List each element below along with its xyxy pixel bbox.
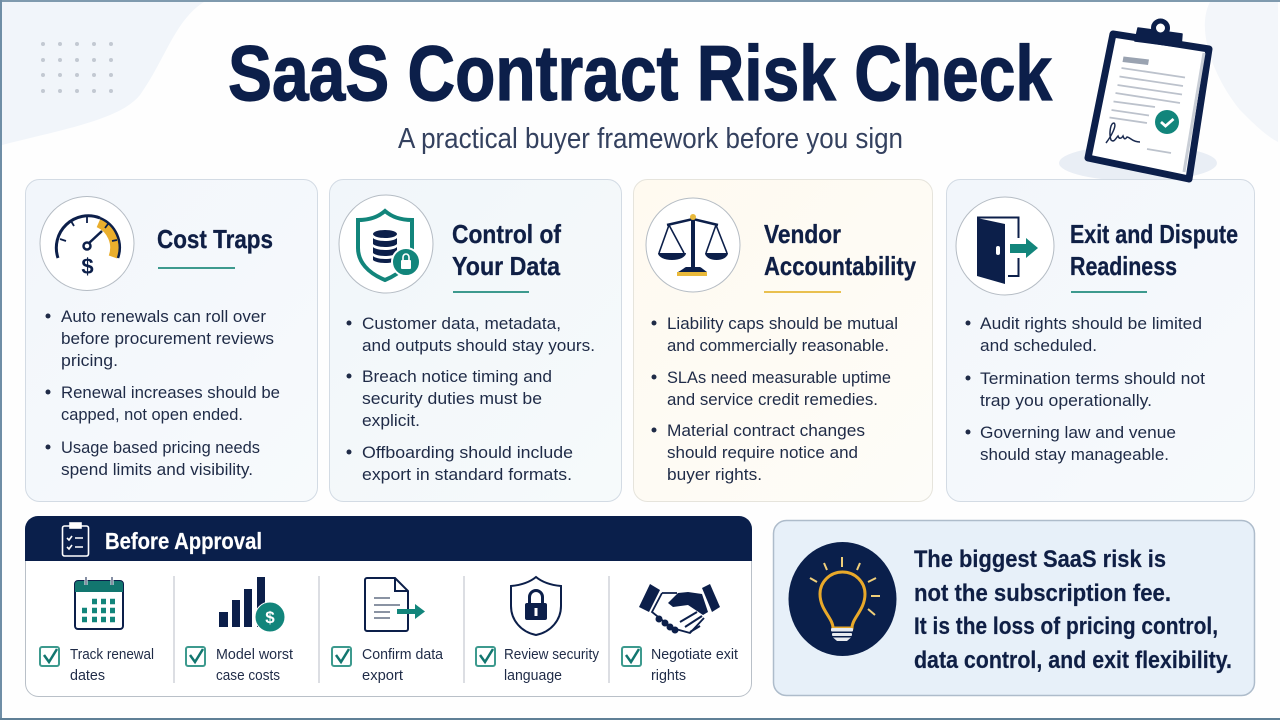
bullet list: explicit. bbox=[362, 412, 420, 430]
bullet list: Breach notice timing and bbox=[362, 368, 552, 386]
item: review security language: Review security bbox=[504, 647, 600, 663]
bullet list: spend limits and visibility. bbox=[61, 461, 253, 479]
heading: Accountability bbox=[764, 251, 916, 281]
callout text bbox=[914, 546, 1232, 674]
heading: Your Data bbox=[452, 251, 560, 281]
bullet list: pricing. bbox=[61, 352, 118, 370]
item: track renewal dates bbox=[40, 577, 154, 684]
heading: Control of bbox=[452, 219, 561, 249]
icon: balance scales bbox=[646, 198, 740, 292]
panel: cost traps bbox=[26, 180, 318, 502]
item: negotiate exit rights: rights bbox=[651, 668, 686, 684]
bullet list bbox=[652, 315, 898, 484]
item: model worst case costs bbox=[186, 577, 293, 684]
icon: shield with padlock bbox=[511, 577, 561, 635]
heading: Vendor bbox=[764, 219, 841, 249]
item: model worst case costs: Model worst bbox=[216, 647, 293, 663]
panel: control of your data bbox=[330, 180, 622, 502]
bullet list bbox=[966, 315, 1205, 464]
item: confirm data export: export bbox=[362, 668, 403, 684]
item: negotiate exit rights: Negotiate exit bbox=[651, 647, 738, 663]
icon: gauge with dollar sign: $ bbox=[81, 254, 94, 279]
heading: Readiness bbox=[1070, 251, 1177, 281]
icon: document with arrow bbox=[365, 578, 425, 631]
bullet list: Customer data, metadata, bbox=[362, 315, 561, 333]
panel: before approval checklist bbox=[25, 516, 752, 696]
bullet list: should stay manageable. bbox=[980, 446, 1169, 464]
bullet list: and outputs should stay yours. bbox=[362, 337, 595, 355]
bullet list bbox=[346, 315, 595, 484]
item: review security language bbox=[476, 577, 600, 684]
subtitle: A practical buyer framework before you sign bbox=[398, 123, 903, 155]
heading bbox=[764, 219, 916, 281]
panel: exit and dispute readiness bbox=[946, 180, 1254, 502]
bullet list: before procurement reviews bbox=[61, 330, 274, 348]
bullet list: should require notice and bbox=[667, 444, 858, 462]
callout text: The biggest SaaS risk is bbox=[914, 546, 1166, 573]
bullet list: Auto renewals can roll over bbox=[61, 308, 267, 326]
title: SaaS Contract Risk Check bbox=[228, 29, 1053, 117]
bullet list: and service credit remedies. bbox=[667, 391, 878, 409]
bullet list: Governing law and venue bbox=[980, 424, 1176, 442]
item: model worst case costs: case costs bbox=[216, 668, 280, 684]
dot pattern bbox=[41, 42, 113, 93]
bullet list: trap you operationally. bbox=[980, 392, 1152, 410]
callout text: It is the loss of pricing control, bbox=[914, 613, 1218, 640]
checkbox bbox=[186, 647, 205, 666]
icon: gauge with dollar sign bbox=[40, 196, 134, 290]
bullet list: buyer rights. bbox=[667, 466, 762, 484]
item: track renewal dates: dates bbox=[70, 668, 105, 684]
checkbox bbox=[40, 647, 59, 666]
icon: checklist clipboard bbox=[62, 523, 88, 556]
bullet list: and commercially reasonable. bbox=[667, 337, 889, 355]
icon: clipboard with signed document bbox=[1088, 21, 1209, 179]
header bar bbox=[25, 516, 752, 561]
item: track renewal dates: Track renewal bbox=[70, 647, 154, 663]
bullet list: and scheduled. bbox=[980, 337, 1097, 355]
item: negotiate exit rights bbox=[622, 584, 738, 684]
heading bbox=[452, 219, 561, 281]
heading: Cost Traps bbox=[157, 224, 273, 254]
checkbox bbox=[476, 647, 495, 666]
bullet list bbox=[46, 308, 280, 479]
icon: door with exit arrow bbox=[956, 197, 1054, 295]
callout text: not the subscription fee. bbox=[914, 580, 1171, 607]
callout: biggest risk bbox=[774, 520, 1254, 696]
bullet list: SLAs need measurable uptime bbox=[667, 369, 891, 387]
item: review security language: language bbox=[504, 668, 562, 684]
icon: bar chart with dollar: $ bbox=[265, 608, 275, 627]
bullet list: Liability caps should be mutual bbox=[667, 315, 898, 333]
heading: Before Approval bbox=[105, 528, 262, 554]
icon: light bulb bbox=[788, 542, 896, 656]
item: confirm data export: Confirm data bbox=[362, 647, 444, 663]
bullet list: capped, not open ended. bbox=[61, 406, 243, 424]
bullet list: export in standard formats. bbox=[362, 466, 572, 484]
bullet list: Termination terms should not bbox=[980, 370, 1205, 388]
checkbox bbox=[332, 647, 351, 666]
icon: calendar bbox=[75, 577, 123, 629]
item: confirm data export bbox=[332, 578, 444, 684]
bullet list: Material contract changes bbox=[667, 422, 865, 440]
heading bbox=[1070, 219, 1238, 281]
bullet list: security duties must be bbox=[362, 390, 542, 408]
icon: shield with database and lock bbox=[339, 195, 433, 293]
checkbox bbox=[622, 647, 641, 666]
heading: Exit and Dispute bbox=[1070, 219, 1238, 249]
bullet list: Audit rights should be limited bbox=[980, 315, 1202, 333]
bullet list: Offboarding should include bbox=[362, 444, 573, 462]
bullet list: Renewal increases should be bbox=[61, 384, 280, 402]
bullet list: Usage based pricing needs bbox=[61, 439, 260, 457]
icon: handshake bbox=[639, 584, 720, 634]
callout text: data control, and exit flexibility. bbox=[914, 647, 1232, 674]
panel: vendor accountability bbox=[634, 180, 932, 502]
